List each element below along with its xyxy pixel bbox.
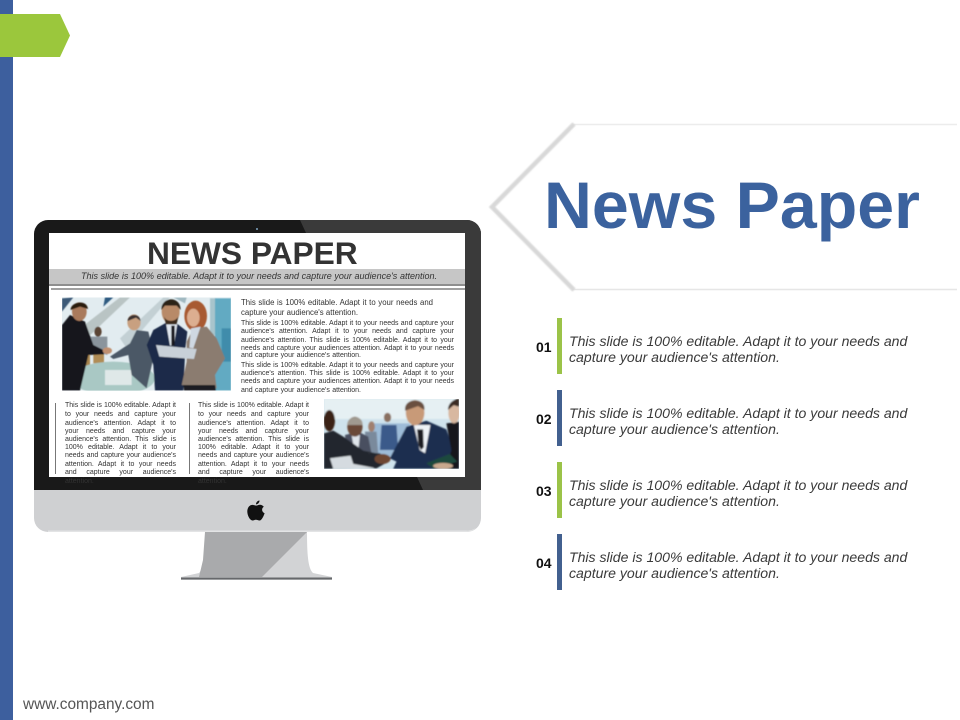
text 04: capture your audience's attention. bbox=[569, 565, 780, 581]
accent bar 01 bbox=[557, 318, 562, 374]
second paragraph: audience's attention. This slide is 100% editable. Adapt it to your bbox=[241, 337, 454, 344]
second paragraph: needs and capture your audiences attention. Adapt it to your needs bbox=[241, 345, 454, 352]
text 04 bbox=[569, 549, 908, 581]
title arrow frame bbox=[489, 122, 957, 292]
number 04: 04 bbox=[536, 555, 552, 571]
article: middle column: audience's attention. This slide is bbox=[198, 436, 309, 443]
text 03: This slide is 100% editable. Adapt it to your needs and bbox=[569, 477, 907, 493]
list item 03 bbox=[536, 462, 908, 518]
footer url: www.company.com bbox=[23, 696, 154, 713]
lead paragraph bbox=[241, 298, 433, 317]
article: middle column: needs and capture your audience's bbox=[198, 452, 309, 459]
monitor illustration bbox=[34, 220, 481, 580]
text 02: This slide is 100% editable. Adapt it to your needs and bbox=[569, 405, 907, 421]
number 02: 02 bbox=[536, 411, 552, 427]
article: middle column bbox=[189, 402, 309, 485]
newspaper heading: NEWS PAPER bbox=[147, 235, 358, 271]
article: left column: to your needs and capture your bbox=[65, 411, 176, 418]
title: News Paper bbox=[544, 169, 920, 243]
article: middle column: and capture your audience's bbox=[198, 469, 309, 476]
lead paragraph: capture your audience's attention. bbox=[241, 308, 358, 317]
article: middle column: attention. Adapt it to your needs bbox=[198, 461, 309, 468]
article: left column: and capture your audience's bbox=[65, 469, 176, 476]
article: left column: This slide is 100% editable. Adapt it bbox=[65, 402, 176, 409]
list item 04 bbox=[536, 534, 908, 590]
text 03 bbox=[569, 477, 908, 509]
text 01: capture your audience's attention. bbox=[569, 349, 780, 365]
article: middle column: audience's attention. Adapt it to bbox=[198, 420, 309, 427]
third paragraph bbox=[241, 362, 454, 394]
second paragraph: audience's attention. Adapt it to your needs and capture your bbox=[241, 328, 454, 335]
third paragraph: This slide is 100% editable. Adapt it to your needs and capture your bbox=[241, 362, 454, 369]
photo: business team with tablet bbox=[62, 297, 231, 391]
text 02 bbox=[569, 405, 908, 437]
article: left column: attention. bbox=[65, 478, 94, 485]
text 01: This slide is 100% editable. Adapt it to your needs and bbox=[569, 333, 907, 349]
accent bar 03 bbox=[557, 462, 562, 518]
second paragraph bbox=[241, 320, 454, 359]
article: left column: audience's attention. Adapt it to bbox=[65, 420, 176, 427]
icon: apple logo bbox=[247, 500, 265, 520]
tag: green pentagon bbox=[0, 14, 70, 57]
list item 01 bbox=[536, 318, 908, 374]
photo: business handshake bbox=[324, 399, 459, 469]
text 02: capture your audience's attention. bbox=[569, 421, 780, 437]
accent bar 04 bbox=[557, 534, 562, 590]
article: middle column: to your needs and capture your bbox=[198, 411, 309, 418]
text 03: capture your audience's attention. bbox=[569, 493, 780, 509]
article: left column bbox=[55, 402, 176, 485]
third paragraph: audience's attention. This slide is 100% editable. Adapt it to your bbox=[241, 370, 454, 377]
article: middle column: your needs and capture your bbox=[198, 428, 309, 435]
article: left column: attention. Adapt it to your needs bbox=[65, 461, 176, 468]
article: left column: 100% editable. Adapt it to your bbox=[65, 444, 176, 451]
sidebar: blue stripe bbox=[0, 0, 13, 720]
list item 02 bbox=[536, 390, 908, 446]
subtitle text: This slide is 100% editable. Adapt it to your needs and capture your audience's attention. bbox=[81, 271, 437, 281]
text 04: This slide is 100% editable. Adapt it to your needs and bbox=[569, 549, 907, 565]
lead paragraph: This slide is 100% editable. Adapt it to your needs and bbox=[241, 298, 433, 307]
number 01: 01 bbox=[536, 339, 552, 355]
second paragraph: and capture your audience's attention. bbox=[241, 352, 361, 359]
monitor body and stand bbox=[34, 220, 481, 580]
second paragraph: This slide is 100% editable. Adapt it to your needs and capture your bbox=[241, 320, 454, 327]
newspaper subtitle band bbox=[49, 269, 465, 290]
article: left column: needs and capture your audience's bbox=[65, 452, 176, 459]
text 01 bbox=[569, 333, 908, 365]
article: left column: audience's attention. This slide is bbox=[65, 436, 176, 443]
article: middle column: attention. bbox=[198, 478, 227, 485]
article: middle column: 100% editable. Adapt it to your bbox=[198, 444, 309, 451]
number 03: 03 bbox=[536, 483, 552, 499]
third paragraph: and capture your audience's attention. bbox=[241, 387, 361, 394]
article: middle column: This slide is 100% editable. Adapt it bbox=[198, 402, 309, 409]
article: left column: your needs and capture your bbox=[65, 428, 176, 435]
article: top paragraphs bbox=[241, 298, 454, 394]
third paragraph: needs and capture your audiences attention. Adapt it to your needs bbox=[241, 378, 454, 385]
accent bar 02 bbox=[557, 390, 562, 446]
